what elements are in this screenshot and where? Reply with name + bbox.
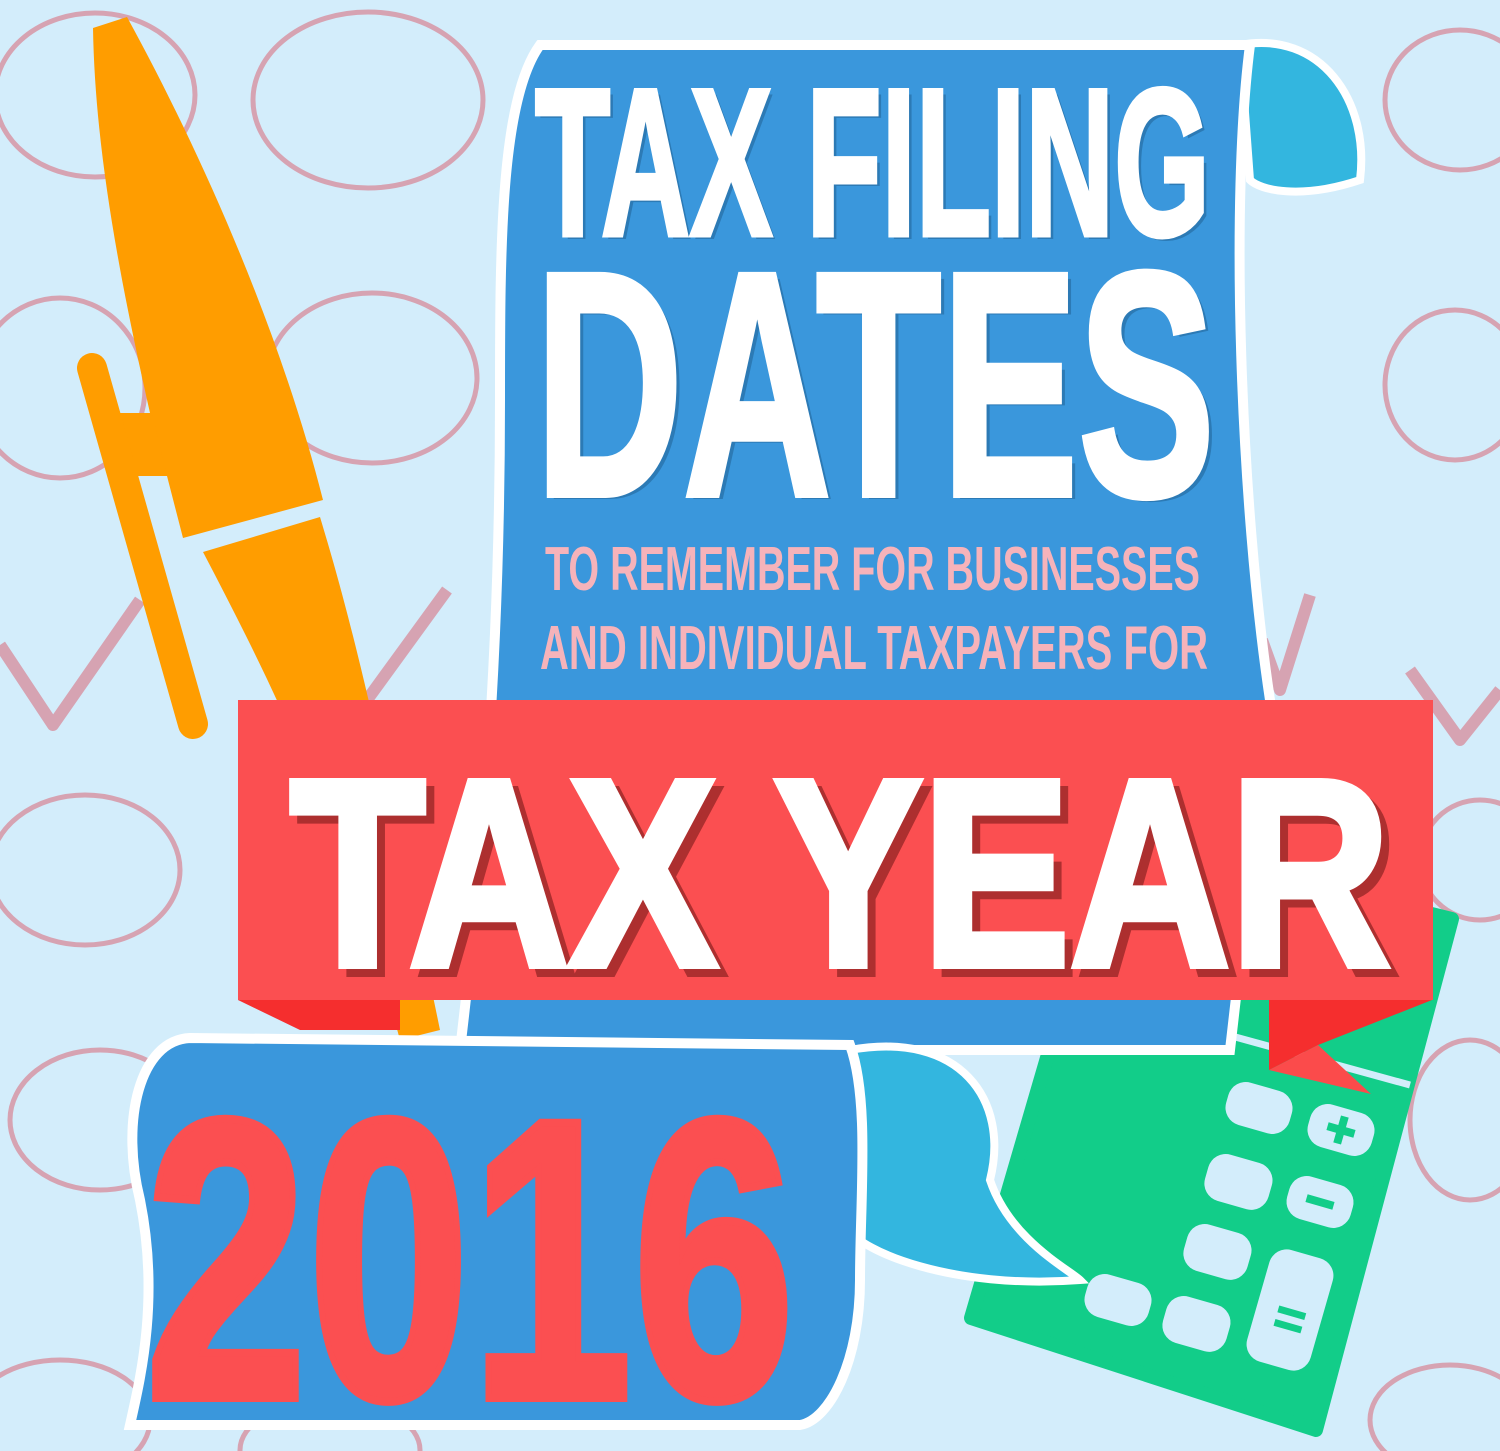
icon: calculator (971, 835, 1452, 1430)
banner: ribbon folds (238, 1000, 1432, 1094)
scroll: bottom curl (130, 1038, 1080, 1425)
subtitle (540, 535, 1208, 683)
title: TAX FILING (535, 45, 1214, 284)
scroll: main body (460, 43, 1361, 1050)
icon: pen (92, 17, 440, 1040)
